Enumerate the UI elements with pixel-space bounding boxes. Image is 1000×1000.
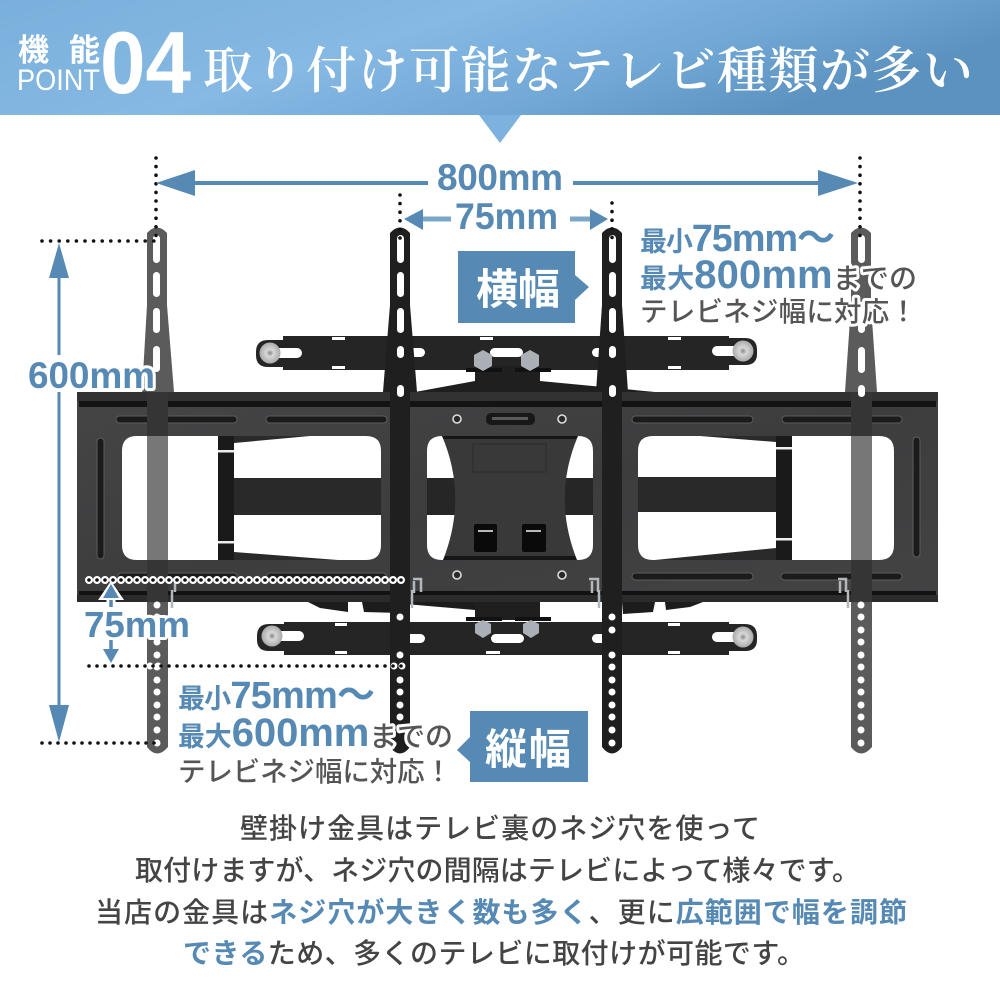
75mm height dimension: 75mm: [84, 604, 190, 645]
header title: 取り付け可能なテレビ種類が多い: [203, 43, 973, 99]
center plate: [442, 436, 578, 560]
description paragraph: 壁掛け金具はテレビ裏のネジ穴を使って: [240, 813, 760, 844]
vertical bar 3: [596, 228, 628, 754]
note: horizontal range: 最小75mm～: [640, 218, 835, 260]
note: horizontal range: テレビネジ幅に対応！: [640, 296, 917, 327]
note: vertical range: 最大600mmまでの: [178, 711, 453, 755]
description paragraph: 取付けますが、ネジ穴の間隔はテレビによって様々です。: [135, 855, 860, 886]
description paragraph: 当店の金具はネジ穴が大きく数も多く、更に広範囲で幅を調節: [95, 896, 907, 928]
vertical bar 2: [383, 228, 417, 754]
note: vertical range: 最小75mm～: [178, 675, 375, 717]
upper bracket: [256, 336, 757, 370]
75mm width dimension: [404, 196, 608, 237]
800mm width dimension: [156, 157, 858, 198]
header badge: 機能 POINT 04: 04: [100, 13, 191, 112]
label box: 縦幅: 縦幅: [485, 726, 571, 773]
swing arms: [218, 436, 792, 560]
600mm height dimension: [28, 243, 155, 742]
note: horizontal range: [640, 218, 917, 327]
header badge: 機能 POINT 04: [17, 13, 191, 112]
600mm height dimension: 600mm: [28, 355, 155, 396]
note: horizontal range: 最大800mmまでの: [640, 253, 917, 297]
hooks: [172, 579, 848, 608]
main frame: [77, 392, 938, 602]
header badge: 機能 POINT 04: POINT: [17, 64, 100, 97]
description paragraph: できるため、多くのテレビに取付けが可能です。: [183, 938, 805, 969]
level and screws: [453, 413, 566, 579]
lower bracket: [257, 622, 757, 655]
vertical bar 4: [845, 228, 877, 754]
label box: 横幅: 横幅: [476, 266, 560, 313]
frame slots: [97, 416, 920, 580]
wall mount product illustration: [77, 228, 938, 754]
vertical bar 1: [142, 228, 174, 754]
header badge: 機能 POINT 04: 機能: [18, 33, 100, 68]
note: vertical range: テレビネジ幅に対応！: [178, 756, 452, 787]
label box: 縦幅: [457, 711, 588, 782]
upper pivot: [415, 350, 655, 392]
lower pivot: [308, 602, 703, 638]
75mm height dimension: [84, 581, 190, 663]
note: vertical range: [178, 675, 453, 787]
description paragraph: [95, 813, 907, 969]
label box: 横幅: [458, 251, 589, 323]
header banner: [0, 0, 1000, 143]
dotted guide lines: [42, 158, 860, 743]
75mm width dimension: 75mm: [455, 196, 558, 237]
800mm width dimension: 800mm: [437, 157, 563, 198]
